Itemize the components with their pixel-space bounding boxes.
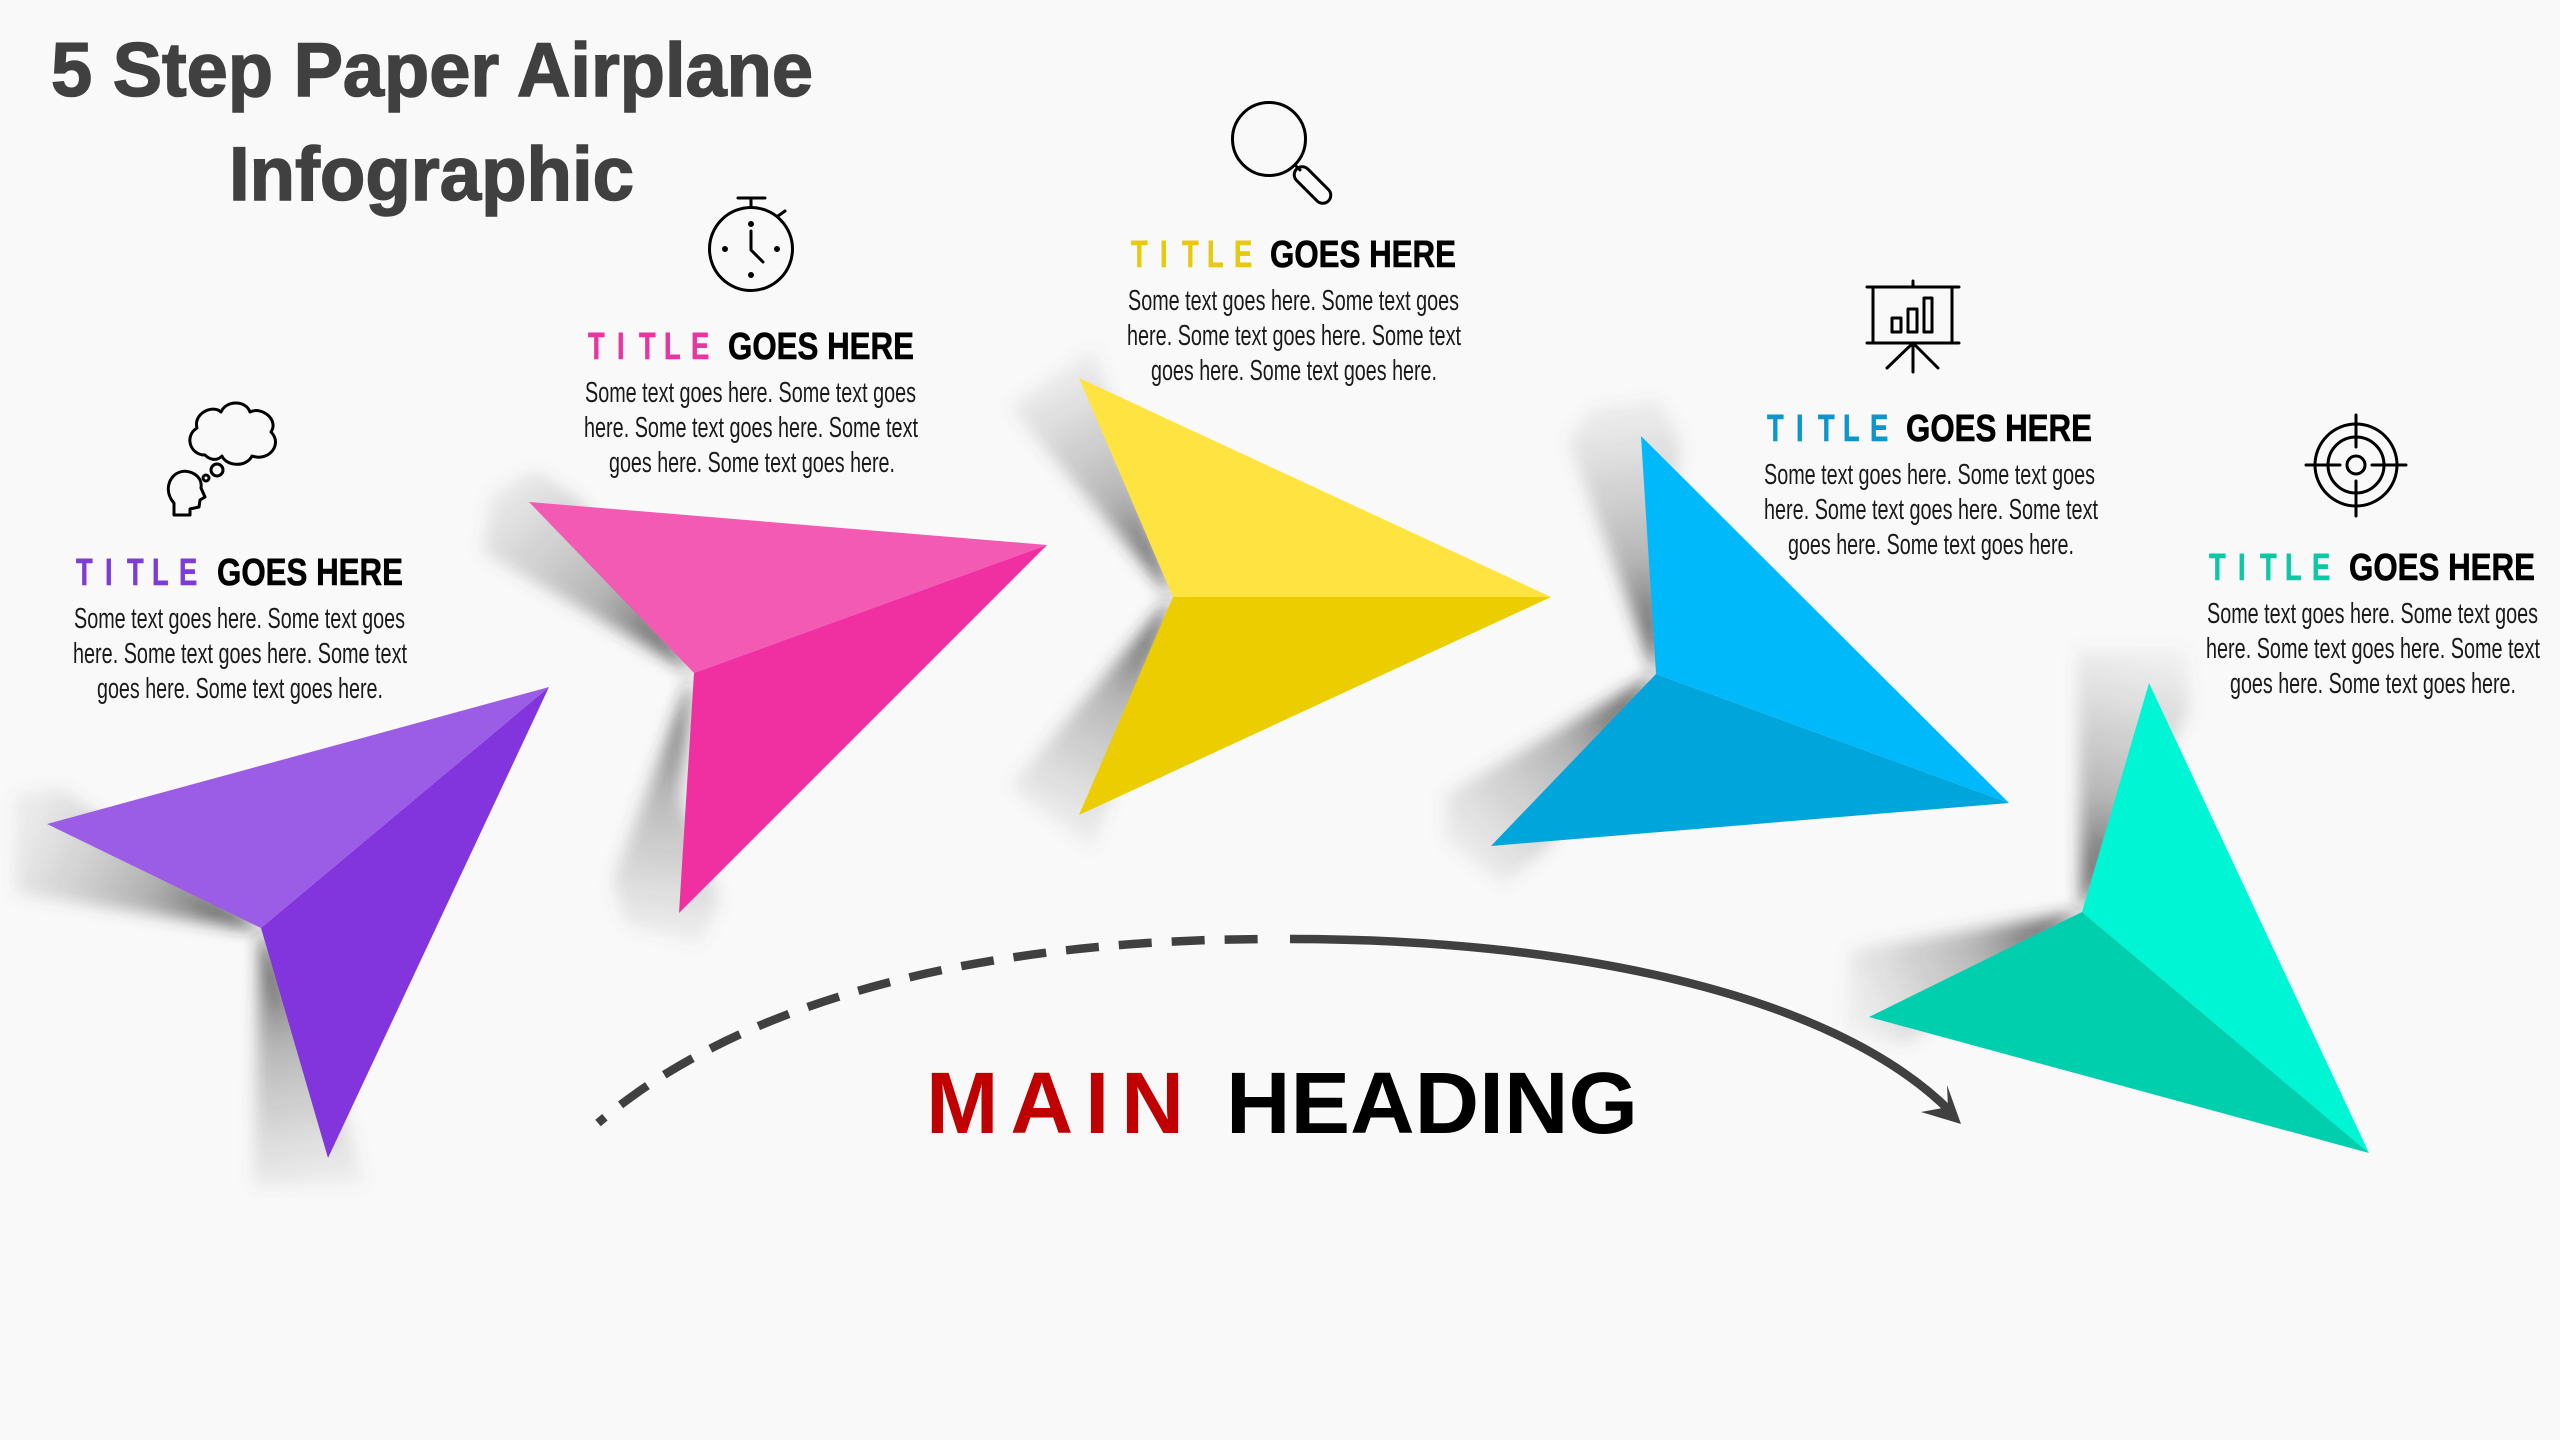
icon: target [2306, 415, 2406, 516]
step 4 text [1764, 408, 2098, 561]
step 4 text: GOES HERE [1906, 408, 2092, 450]
step 3 text [1127, 234, 1461, 387]
main heading: MAIN [926, 1055, 1184, 1152]
main heading: HEADING [1226, 1055, 1638, 1152]
icon: presentation board [1867, 281, 1959, 372]
step 3 text: Some text goes here. Some text goes [1128, 285, 1459, 317]
step 4 text: Some text goes here. Some text goes [1764, 459, 2095, 491]
step 1 text: GOES HERE [217, 552, 403, 594]
icon: stopwatch [710, 198, 792, 290]
step 2 text: Some text goes here. Some text goes [585, 377, 916, 409]
plane 4: blue [1445, 400, 2009, 885]
step 3 text: GOES HERE [1270, 234, 1456, 276]
step 1 text: goes here. Some text goes here. [97, 673, 383, 705]
title: 5 Step Paper Airplane [51, 28, 813, 113]
step 3 text: goes here. Some text goes here. [1151, 355, 1437, 387]
step 2 text: here. Some text goes here. Some text [584, 412, 918, 444]
step 2 text: TITLE [588, 326, 709, 368]
title [51, 28, 813, 217]
step 2 text [584, 326, 918, 479]
step 1 text: here. Some text goes here. Some text [73, 638, 407, 670]
plane 3: yellow [1010, 347, 1551, 850]
title: Infographic [229, 132, 634, 217]
step 5 text [2206, 547, 2540, 700]
icon: magnifier [1232, 102, 1334, 207]
step 1 text: TITLE [76, 552, 197, 594]
main heading [926, 1055, 1638, 1152]
plane 5: teal [1845, 650, 2369, 1153]
step 1 text: Some text goes here. Some text goes [74, 603, 405, 635]
step 5 text: TITLE [2209, 547, 2330, 589]
plane 2: pink [483, 470, 1047, 945]
step 4 text: goes here. Some text goes here. [1788, 529, 2074, 561]
step 3 text: here. Some text goes here. Some text [1127, 320, 1461, 352]
plane 1: purple [15, 687, 549, 1187]
step 4 text: here. Some text goes here. Some text [1764, 494, 2098, 526]
curved arrow [598, 939, 1961, 1124]
step 4 text: TITLE [1767, 408, 1888, 450]
step 3 text: TITLE [1131, 234, 1252, 276]
icon: thought bubble [168, 403, 275, 515]
step 2 text: GOES HERE [728, 326, 914, 368]
step 1 text [73, 552, 407, 705]
step 2 text: goes here. Some text goes here. [609, 447, 895, 479]
